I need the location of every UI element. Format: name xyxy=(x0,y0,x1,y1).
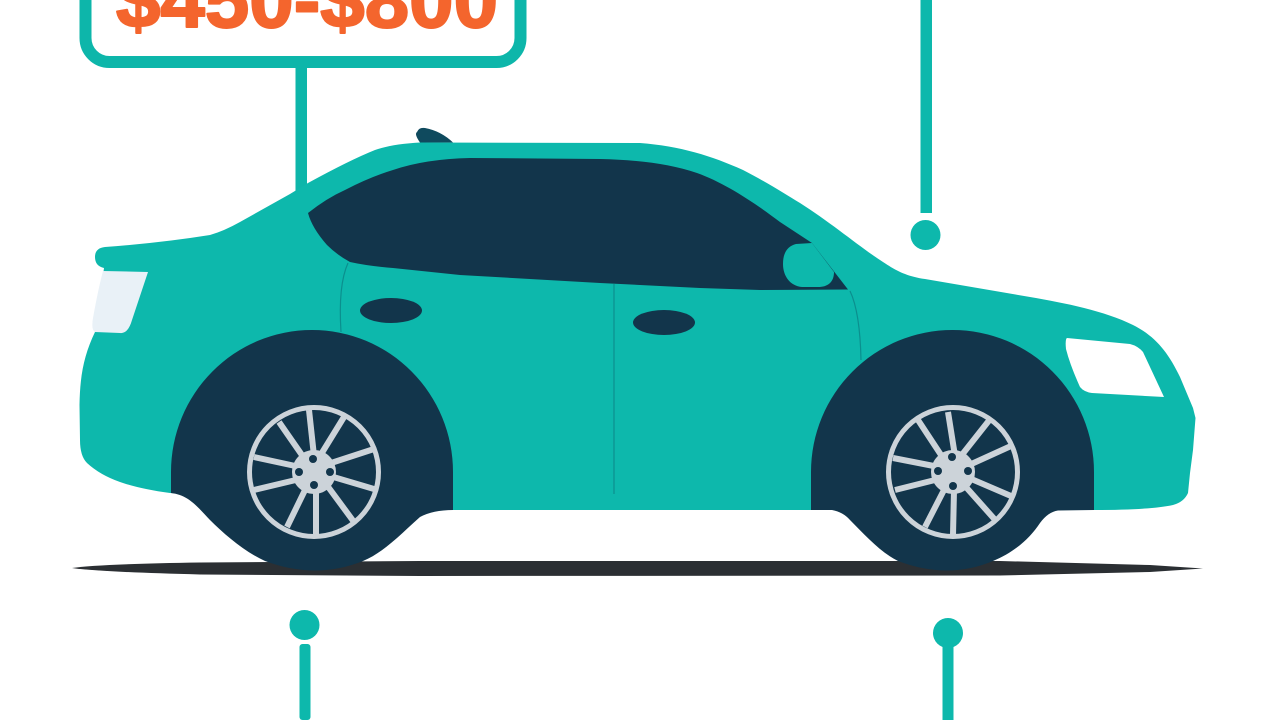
connector: price box to car xyxy=(296,66,307,192)
rear wheel tyre xyxy=(171,330,453,570)
front door handle xyxy=(633,310,695,335)
rear wheel rim xyxy=(250,408,378,536)
connector: top right with dot xyxy=(910,0,940,250)
car xyxy=(80,128,1196,570)
door seams xyxy=(340,263,861,494)
window xyxy=(308,158,848,290)
side mirror xyxy=(783,243,834,287)
icon: shark fin antenna xyxy=(416,128,453,142)
front headlight xyxy=(1066,338,1164,397)
rear tail light xyxy=(92,271,148,333)
callout: price box xyxy=(86,0,520,62)
front wheel rim xyxy=(888,408,1018,536)
ground shadow xyxy=(72,561,1203,576)
front wheel tyre xyxy=(811,330,1094,570)
car body xyxy=(80,142,1196,510)
connector: bottom right with dot xyxy=(933,618,963,720)
rear door handle xyxy=(360,298,422,323)
connector: bottom left with dot xyxy=(290,610,320,720)
